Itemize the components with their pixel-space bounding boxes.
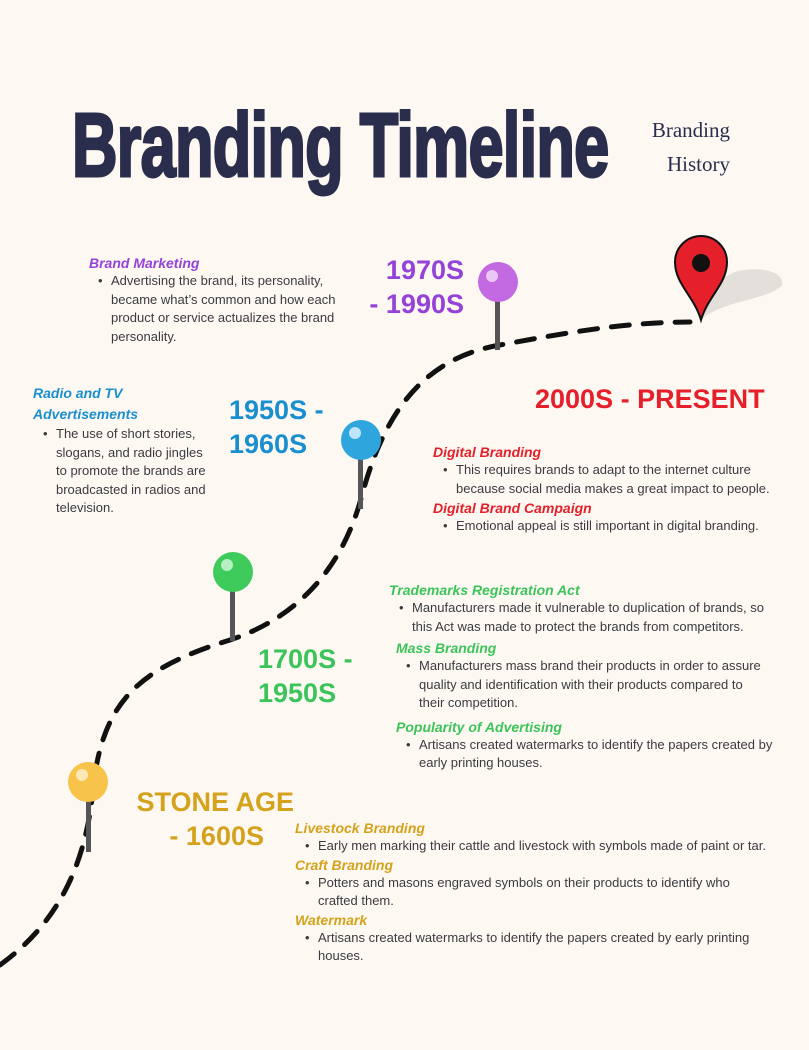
text: livestock / craft / watermark: Artisans created watermarks to identify the papers created by early printing (318, 930, 749, 944)
text: radio and tv (32, 385, 206, 515)
text: trademarks / mass branding / advertising: early printing houses. (419, 755, 543, 770)
text: digital branding: Digital Brand Campaign (433, 500, 592, 516)
text: digital branding: because social media makes a great impact to people. (456, 480, 770, 496)
subtitle: Branding (652, 118, 730, 142)
era: 1970s-1990s (369, 255, 464, 319)
text: trademarks / mass branding / advertising: this Act was made to protect the brands from competitors. (412, 618, 744, 634)
text: trademarks / mass branding / advertising: quality and identification with their products compared to (419, 676, 743, 692)
text: trademarks / mass branding / advertising: Artisans created watermarks to identify the papers created by (419, 736, 772, 752)
text: trademarks / mass branding / advertising: Manufacturers mass brand their products in order to assure (419, 658, 761, 673)
era: 1950s-1960s (229, 395, 324, 459)
era: 1700s-1950s (258, 644, 353, 708)
text: trademarks / mass branding / advertising: Trademarks Registration Act (389, 582, 580, 598)
era: 1970s-1990s: - 1990S (369, 289, 464, 319)
text: brand marketing: personality. (111, 328, 177, 344)
text: livestock / craft / watermark: Livestock Branding (295, 820, 425, 836)
text: radio and tv: to promote the brands are (56, 463, 206, 478)
subtitle (652, 118, 730, 176)
era: 2000s-present: 2000S - PRESENT (535, 384, 765, 414)
text: livestock / craft / watermark: crafted them. (318, 893, 394, 908)
era: 1700s-1950s: 1700S - (258, 644, 353, 674)
text: trademarks / mass branding / advertising: Mass Branding (396, 640, 496, 656)
text: brand marketing: product or service actualizes the brand (111, 310, 334, 325)
text: livestock / craft / watermark: houses. (318, 948, 364, 963)
era: 1700s-1950s: 1950S (258, 678, 336, 708)
text: trademarks / mass branding / advertising: their competition. (419, 695, 518, 710)
text: trademarks / mass branding / advertising: • (399, 600, 404, 615)
text: brand marketing: • (98, 273, 103, 288)
icon: map marker (675, 236, 782, 320)
text: digital branding: This requires brands to adapt to the internet culture (456, 462, 751, 477)
text: livestock / craft / watermark: Craft Branding (295, 856, 393, 872)
text: radio and tv: broadcasted in radios and (56, 482, 206, 496)
text: brand marketing: Advertising the brand, its personality, (111, 273, 323, 288)
text: trademarks / mass branding / advertising: • (406, 736, 411, 752)
icon: purple pin (478, 262, 518, 350)
subtitle: History (667, 152, 730, 176)
text: trademarks / mass branding / advertising: • (406, 658, 411, 673)
text: digital branding: Emotional appeal is still important in digital branding. (456, 518, 759, 533)
text: radio and tv: slogans, and radio jingles (56, 444, 203, 460)
text: radio and tv: television. (56, 500, 114, 515)
text: brand marketing: became what’s common and how each (111, 292, 336, 306)
era: 1950s-1960s: 1950S - (229, 395, 324, 425)
era: stone age-1600s (136, 787, 294, 851)
text: trademarks / mass branding / advertising: Popularity of Advertising (396, 718, 562, 734)
text: digital branding: • (443, 462, 448, 477)
text: radio and tv: Advertisements (33, 406, 138, 422)
era: stone age-1600s: STONE AGE (136, 787, 294, 817)
text: digital branding: • (443, 518, 448, 533)
text: digital branding (433, 444, 770, 533)
era: 1950s-1960s: 1960S (229, 429, 307, 459)
text: trademarks / mass branding / advertising (389, 582, 772, 770)
text: livestock / craft / watermark: • (305, 838, 310, 853)
text: livestock / craft / watermark (295, 820, 766, 963)
text: radio and tv: • (43, 426, 48, 441)
text: digital branding: Digital Branding (433, 444, 541, 460)
text: livestock / craft / watermark: Early men marking their cattle and livestock with symbols made of paint or tar. (318, 838, 766, 853)
text: livestock / craft / watermark: • (305, 874, 310, 890)
text: trademarks / mass branding / advertising: Manufacturers made it vulnerable to duplication of brands, so (412, 600, 764, 615)
text: brand marketing (89, 255, 336, 344)
text: radio and tv: The use of short stories, (56, 426, 195, 441)
era: stone age-1600s: - 1600S (169, 821, 264, 851)
era: 1970s-1990s: 1970S (386, 255, 464, 285)
icon: green pin (213, 552, 253, 641)
title: Branding Timeline (72, 96, 609, 196)
text: radio and tv: Radio and TV (33, 385, 122, 401)
icon: yellow pin (68, 762, 108, 852)
icon: blue pin (341, 420, 381, 509)
text: livestock / craft / watermark: Watermark (295, 912, 367, 928)
text: brand marketing: Brand Marketing (89, 255, 199, 271)
text: livestock / craft / watermark: Potters and masons engraved symbols on their products to identify who (318, 874, 730, 890)
text: livestock / craft / watermark: • (305, 930, 310, 944)
